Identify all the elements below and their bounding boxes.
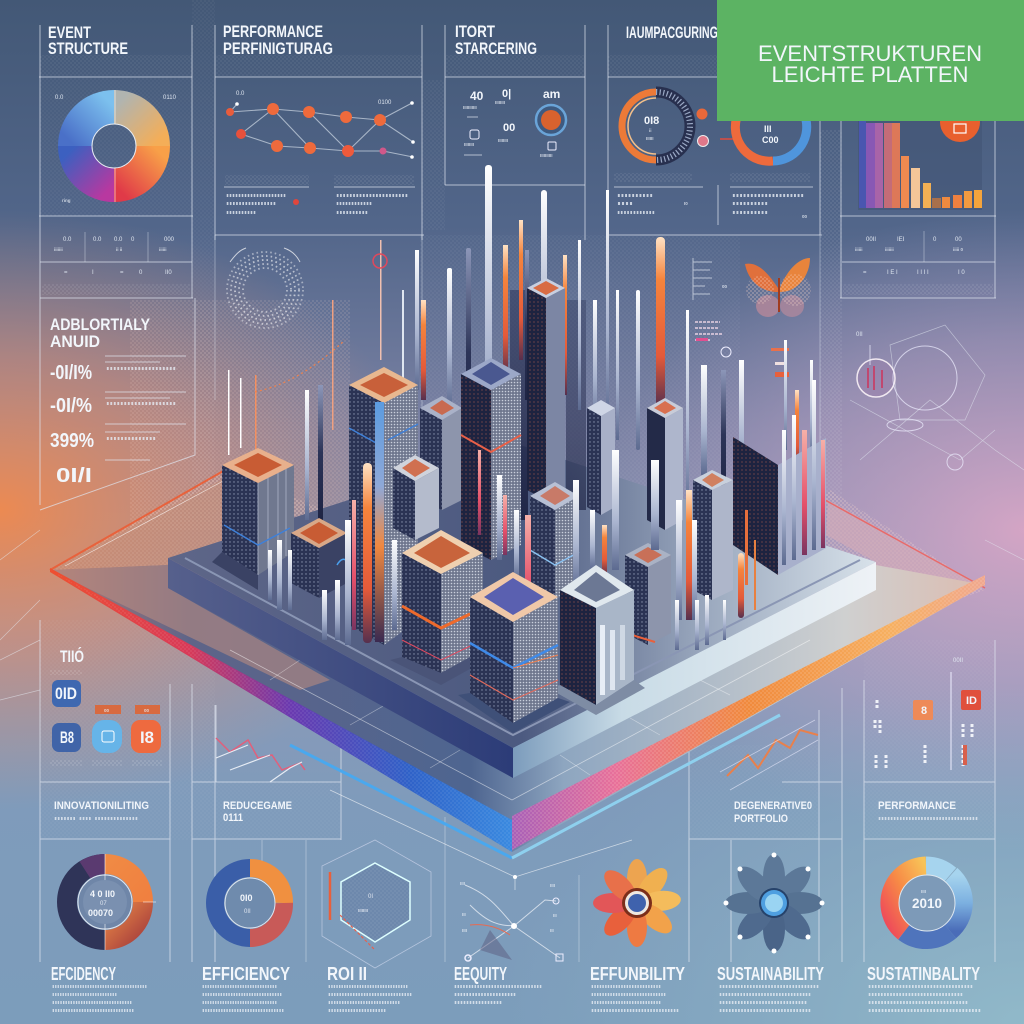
caption: degeneration [734,800,812,825]
data table: event structure: iiiiiii [54,247,63,252]
donut chart: event structure: ring [62,198,71,203]
data table: bar chart: 0 [933,237,937,243]
data table: event structure: I [92,270,94,276]
text blocks: manufacturing: I0 [684,201,688,206]
text blocks: manufacturing: IIIIIIIIII [732,210,768,215]
network diagram: right panel [850,325,995,470]
butterfly graphic [745,258,811,317]
value rows: 0I/I [56,465,92,487]
icon: orange dial [536,105,566,135]
tower: small front of centre [393,455,439,540]
metric: efficiency 1: IIIIIIIIIIIIIIIIIIIIIIIIIIIIIII [52,1000,132,1005]
text blocks: manufacturing: 00 [802,214,808,219]
metric: sustainability 1: IIIIIIIIIIIIIIIIIIIIIIIIIIIII [719,1000,807,1005]
small icon grid: IIIIIIIIII [540,153,553,158]
small icon grid: IIIIIIIIIII [463,105,477,110]
heading: annual [50,315,151,351]
outer diamond plate with colour bands [0,450,1024,890]
small icon grid [463,87,560,158]
data table: event structure: 0.0 [114,237,123,243]
donut: efficiency 1 [67,854,156,950]
value rows [50,356,186,487]
network diagram: right panel: 0II [856,332,863,338]
small icon grid: IIIIIIII [464,142,474,147]
metric: equity [454,964,542,1005]
metric: effunbility [590,964,685,1013]
heading: performance: PERFORMANCE [223,22,323,41]
donut: efficiency 1: 4 0 II0 [90,889,115,899]
data table: event structure: II0 [165,270,172,276]
small icon grid: 0| [502,88,511,100]
data table: bar chart: iiiiiii [885,247,894,252]
metric: sustainability 2: IIIIIIIIIIIIIIIIIIIIIIIIIIIIIII [868,992,963,997]
data table: bar chart: I E I [887,270,898,276]
text list beside butterfly: 00 [722,284,728,289]
data table: event structure [42,232,190,295]
line chart: lower right [720,720,818,790]
background spikes [228,165,813,520]
network graphic: equity: IIII [550,883,555,888]
tower: front centre [390,530,495,685]
donut: sustainability [890,866,963,940]
caption: performance: IIIIIIIIIIIIIIIIIIIIIIIIIIIIIIIII [878,816,978,821]
donut: sustainability: 2010 [912,895,942,911]
metric: equity: IIIIIIIIIIIIIIIIIIIIIIIIIIIIIII [454,984,542,989]
tower: back centre-left [420,396,462,510]
metric: roi [327,964,412,1013]
labels: dotted captions [50,670,162,766]
heading: annual: ADBLORTIALY [50,315,151,334]
network graphic: equity: IIII [460,881,465,886]
metric: efficiency 2: IIIIIIIIIIIIIIIIIIIIIIIIIIIIII [202,1000,277,1005]
button: blue top: 0ID [55,684,77,703]
network graphic: equity: III [462,912,466,917]
tower: dark block with light bars [733,380,826,585]
icon: connector dots [696,108,735,146]
title banner: LEICHTE PLATTEN [772,62,968,87]
value rows: 399% [50,430,94,452]
isometric towers [212,278,826,733]
data table: event structure: 0.0 [63,237,72,243]
tower: middle small [530,482,579,600]
caption: innovation: INNOVATIONILITING [54,800,149,812]
metric: sustainability 1: IIIIIIIIIIIIIIIIIIIIIIIIIIIIII [719,1008,811,1013]
panel: icon buttons [50,647,162,766]
donut chart: event structure: 0110 [163,95,177,101]
caption: innovation: IIIIIII IIII IIIIIIIIIIIIII [54,816,138,821]
text blocks: manufacturing: IIII [617,201,633,206]
text blocks: manufacturing [614,173,813,225]
icon: blue flower [724,852,824,954]
halftone dotted texture areas [40,0,995,840]
metric: effunbility: IIIIIIIIIIIIIIIIIIIIIIIIII [591,1000,661,1005]
tower: tall left-centre [349,367,418,645]
metric: efficiency 2: IIIIIIIIIIIIIIIIIIIIIIIIIIIIIII [202,992,282,997]
ring gauge: left: ii [649,128,652,133]
ring gauge: left: IIIIII [646,136,654,141]
data table: bar chart: IEI [897,237,905,243]
donut: efficiency 1: 00070 [88,908,113,918]
metric: efficiency 2: EFFICIENCY [202,964,290,984]
caption: performance: PERFORMANCE [878,800,956,812]
text blocks: performance: IIIIIIIIIIIIIIIIIIIIII [336,193,408,198]
text blocks: manufacturing: IIIIIIIIII [617,193,653,198]
network graph: 0.0 [236,91,245,97]
dotted ring chart [227,248,303,328]
metric: effunbility: IIIIIIIIIIIIIIIIIIIIIIIIIIIIII [591,1008,679,1013]
data table: bar chart: I 0 [958,270,965,276]
data table: event structure: ii ii [116,247,122,252]
donut: efficiency 2 [215,868,284,938]
data table: bar chart: 00II [866,237,876,243]
caption: innovation [54,800,149,821]
tower: small front-left [291,518,347,598]
metric: efficiency 1: EFCIDENCY [51,964,116,984]
network graph: 0100 [378,100,392,106]
icon strip: lower right panel: 00II [953,658,963,664]
data table: bar chart: I I I I [917,270,929,276]
button: blue lower: B8 [60,728,74,747]
captions: middle row [54,800,978,825]
metric: sustainability 2 [867,964,981,1013]
title banner [717,0,1024,121]
metric: sustainability 1: SUSTAINABILITY [717,964,824,984]
data table: event structure: 0 [131,237,135,243]
donut chart: event structure: 0.0 [55,95,64,101]
ring gauge: right: III [764,124,772,134]
tower: far right small [693,470,733,600]
text blocks: performance: IIIIIIIIII [226,210,256,215]
title banner: EVENTSTRUKTUREN [758,41,982,66]
metric: equity: EEQUITY [454,964,507,984]
ring gauge: left [622,92,690,160]
hexagon graphic: IIIIIIII [358,908,368,913]
icon strip: lower right panel: 8 [921,705,927,717]
heading: event structure [48,23,128,58]
donut: efficiency 2: 0I0 [240,893,253,903]
button: orange: I8 [140,728,154,747]
text blocks: performance: IIIIIIIIIIIIIIII [226,201,276,206]
data table: event structure: = [120,270,124,276]
text blocks: performance: IIIIIIIIIIII [336,201,372,206]
heading: annual: ANUID [50,332,100,351]
metric: sustainability 1 [717,964,824,1013]
ring gauge: right [735,110,807,161]
labels: small orange tags: 00 [104,708,110,713]
value rows: IIIIIIIIIIIIII [106,436,156,441]
tower: back right [587,400,615,515]
icon: orange flower [593,859,682,947]
line chart: lower left [216,705,305,782]
metric: effunbility: EFFUNBILITY [590,964,685,984]
labels: small orange tags [95,705,160,714]
network graphic: equity: III [553,913,557,918]
donut: efficiency 2: 0II [244,909,251,915]
caption: degeneration: DEGENERATIVE0 [734,800,812,812]
central platform slab [168,445,876,778]
value rows: -0I/I% [50,362,92,384]
tower: right tall [647,398,683,530]
label: top number: TIIÓ [60,647,84,666]
small icon grid: 40 [470,89,484,103]
text blocks: performance [224,175,415,215]
metric: efficiency 1 [51,964,147,1013]
caption: reducegame: 0111 [223,812,243,824]
tower: tall back centre [527,278,565,500]
donut: sustainability: IIII [921,889,926,894]
small icon grid: am [543,87,560,101]
metric: sustainability 2: IIIIIIIIIIIIIIIIIIIIIIIIIIIIIIIIII [868,984,973,989]
panel: manufacturing rings [614,23,813,225]
metric: sustainability 2: SUSTATINBALITY [867,964,980,984]
data table: bar chart: 00 [955,237,962,243]
heading: starcering [455,22,537,58]
data table: bar chart: iiiii 0 [953,247,964,252]
data table: bar chart: = [863,270,867,276]
bar chart [858,115,982,210]
metric: sustainability 1: IIIIIIIIIIIIIIIIIIIIIIIIIIIIIII [719,992,811,997]
small icon grid: IIIIIIII [495,100,505,105]
metric: effunbility: IIIIIIIIIIIIIIIIIIIIIIIIIIII [591,992,666,997]
data table: event structure: = [64,270,68,276]
metric: efficiency 1: IIIIIIIIIIIIIIIIIIIIIIIIIIIIIIIIIIIIII [52,984,147,989]
bottom headings and descriptions [51,964,981,1013]
heading: performance [223,22,333,58]
network graphic: equity: III [550,928,554,933]
icon: orange badge [940,102,980,142]
donut chart: event structure [55,90,177,203]
metric: roi: IIIIIIIIIIIIIIIIIIIIIIIIIIIIIII [328,992,412,997]
text blocks: manufacturing: IIIIIIIIII [732,201,768,206]
value rows: IIIIIIIIIIIIIIIIIIII [106,366,176,371]
value rows: -0I/% [50,395,92,417]
value rows: IIIIIIIIIIIIIIIIIIII [106,401,176,406]
hexagon graphic: 0I [368,894,373,900]
metric: effunbility: IIIIIIIIIIIIIIIIIIIIIIIIII [591,984,661,989]
metric: sustainability 2: IIIIIIIIIIIIIIIIIIIIIIIIIIIIIIIIIII [868,1008,981,1013]
data table: event structure: 000 [164,237,175,243]
metric: efficiency 1: IIIIIIIIIIIIIIIIIIIIIIIIIIIIIII [52,1008,134,1013]
text blocks: performance: IIIIIIIIII [336,210,368,215]
heading: performance: PERFINIGTURAG [223,39,333,58]
button: light blue [92,720,122,753]
metric: efficiency 2 [202,964,290,1013]
caption: degeneration: PORTFOLIO [734,813,788,825]
labels: small orange tags: 00 [144,708,150,713]
tower: centre tall [461,358,521,560]
heading: manufacturing: IAUMPACGURING [626,23,718,42]
metric: roi: IIIIIIIIIIIIIIIIIIIIIIIIIII [328,1000,400,1005]
data table: bar chart [843,231,993,295]
heading: starcering: STARCERING [455,39,537,58]
panel: additionally annual values [50,315,186,487]
data table: event structure: 0.0 [93,237,102,243]
metric: sustainability 2: IIIIIIIIIIIIIIIIIIIIIIIIIIIIIIII [868,1000,968,1005]
small icon grid: IIIIIIII [498,138,508,143]
foreground thin bars [268,450,756,650]
heading: event structure: EVENT [48,23,91,42]
panel: iot starcering [455,22,566,158]
panel: bar chart [843,102,993,295]
tower: front main with blue top [458,572,570,733]
hexagon graphic [322,840,431,968]
data table: event structure: iiiiii [159,247,167,252]
text list beside butterfly [693,258,789,377]
text blocks: manufacturing: IIIIIIIIIIII [617,210,655,215]
caption: reducegame [223,800,292,824]
small icon grid: 00 [503,122,515,134]
metric: equity: IIIIIIIIIIIIIIII [454,1000,502,1005]
metric: equity: IIIIIIIIIIIIIIIIIIIII [454,992,516,997]
heading: starcering: ITORT [455,22,495,41]
panel: performance network [223,22,415,215]
metric: efficiency 2: IIIIIIIIIIIIIIIIIIIIIIIIIIIIIII [202,1008,284,1013]
data table: event structure: 0 [139,270,143,276]
caption: performance [878,800,978,821]
ring gauge: left: 0I8 [644,115,659,127]
text blocks: performance: IIIIIIIIIIIIIIIIIIII [226,193,286,198]
metric: sustainability 1: IIIIIIIIIIIIIIIIIIIIIIIIIIIIIIIII [719,984,819,989]
metric: efficiency 2: IIIIIIIIIIIIIIIIIIIIIIIIIIIIII [202,984,277,989]
tower: right small block [625,543,671,645]
caption: reducegame: REDUCEGAME [223,800,292,812]
network graph [226,91,415,159]
donut: efficiency 1: 07 [100,901,107,907]
data table: bar chart: iiiiii [855,247,863,252]
metric: roi: ROI II [327,964,367,984]
metric: roi: IIIIIIIIIIIIIIIIIIIIIIIIIIIIIII [328,984,408,989]
bottom row of metrics [67,840,963,968]
ring gauge: right: C00 [762,135,779,145]
network graphic: equity [460,881,563,961]
tower: front right grey [548,565,645,715]
panel: event structure [42,23,190,295]
icon strip: lower right panel: ID [966,695,977,707]
icon strip: lower right panel [875,658,981,770]
metric: efficiency 1: IIIIIIIIIIIIIIIIIIIIIIIIII [52,992,117,997]
heading: event structure: STRUCTURE [48,39,128,58]
network graphic: equity: IIII [462,928,467,933]
text blocks: manufacturing: IIIIIIIIIIIIIIIIIIII [732,193,804,198]
tower: left large [212,448,294,590]
metric: roi: IIIIIIIIIIIIIIIIIIIII [328,1008,386,1013]
